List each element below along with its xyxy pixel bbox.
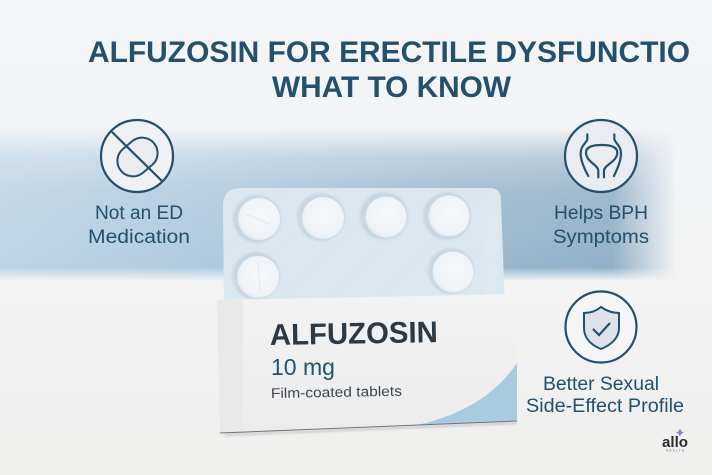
pills xyxy=(232,192,474,300)
label xyxy=(553,203,649,248)
box label: ALFUZOSIN xyxy=(270,316,438,352)
logo: allo health xyxy=(662,428,688,452)
box label: 10 mg xyxy=(271,354,335,380)
blister pack xyxy=(223,188,505,310)
label: Medication xyxy=(88,227,190,248)
icon: crossed-out pill xyxy=(101,120,173,192)
label xyxy=(88,203,190,248)
medicine box xyxy=(217,294,519,435)
logo: allo health: HEALTH xyxy=(666,448,684,452)
icon: bladder xyxy=(565,120,637,192)
label: Symptoms xyxy=(553,227,649,248)
panel: helps BPH symptoms xyxy=(553,120,649,248)
box label xyxy=(270,316,438,401)
panel: better sexual side-effect profile xyxy=(526,292,684,417)
panel: not an ED medication xyxy=(88,120,190,248)
box label: Film-coated tablets xyxy=(271,383,402,401)
background xyxy=(0,133,670,280)
title xyxy=(88,36,690,104)
title: ALFUZOSIN FOR ERECTILE DYSFUNCTIO xyxy=(88,36,690,69)
logo: allo health: allo xyxy=(662,434,688,451)
label: Not an ED xyxy=(95,203,183,224)
icon: shield with check xyxy=(566,292,636,362)
label xyxy=(526,374,684,417)
title: WHAT TO KNOW xyxy=(272,71,512,104)
label: Better Sexual xyxy=(543,374,659,395)
label: Side-Effect Profile xyxy=(526,396,684,417)
label: Helps BPH xyxy=(554,203,648,224)
